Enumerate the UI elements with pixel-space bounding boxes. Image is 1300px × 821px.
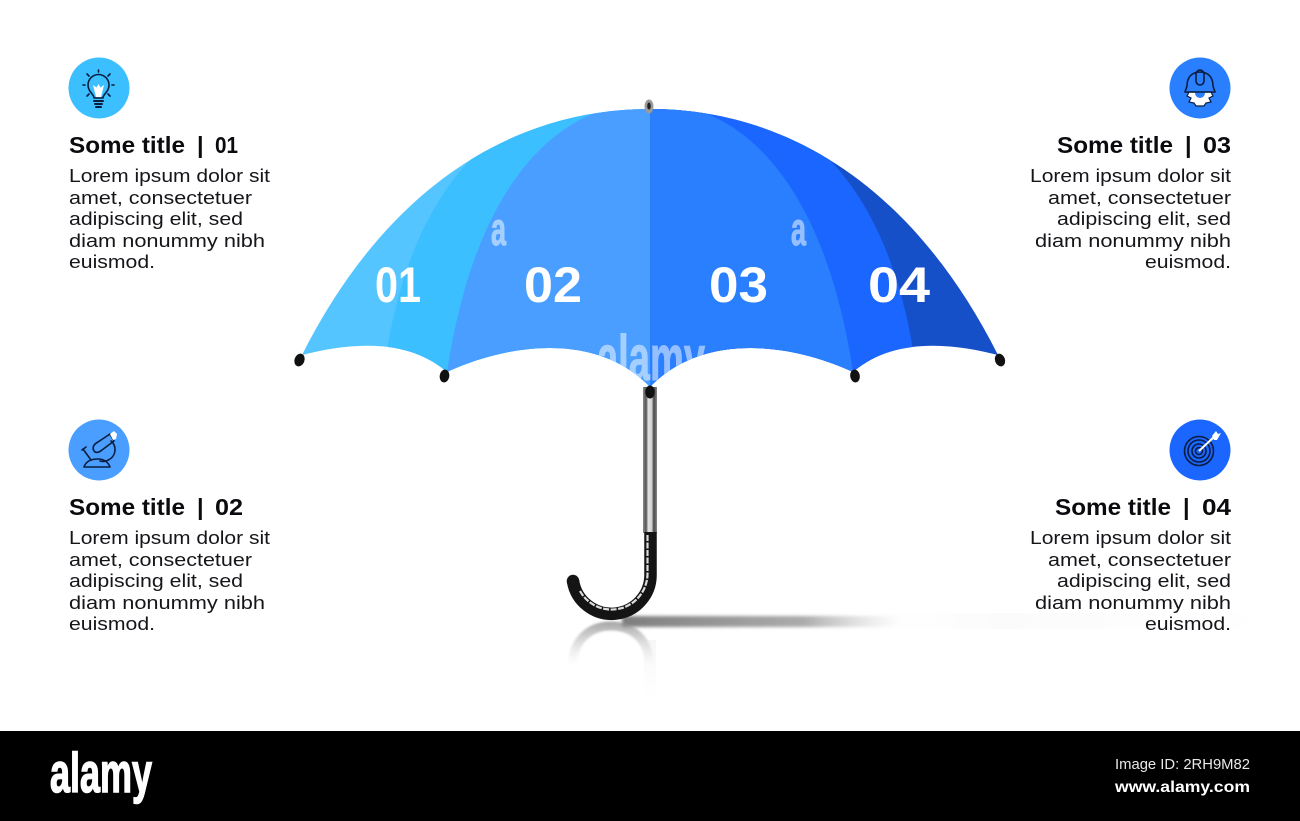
text 01: diam nonummy nibh xyxy=(69,230,265,251)
footer bar xyxy=(0,731,1300,821)
text 03: adipiscing elit, sed xyxy=(1057,208,1231,229)
panel 01 outer xyxy=(302,109,649,386)
text 01 xyxy=(69,165,270,272)
title 03: 03 xyxy=(1203,132,1231,158)
text 03: amet, consectetuer xyxy=(1048,187,1231,208)
number 04: 04 xyxy=(868,257,930,313)
text 02: euismod. xyxy=(69,613,155,634)
panel 03 xyxy=(650,100,853,400)
image id: Image ID: 2RH9M82 xyxy=(1115,757,1250,773)
title 02: Some title xyxy=(69,494,185,520)
canopy watermark: a xyxy=(491,203,506,255)
panel 04 outer xyxy=(651,109,998,386)
text 02: diam nonummy nibh xyxy=(69,592,265,613)
text 01: amet, consectetuer xyxy=(69,187,252,208)
title 03: Some title xyxy=(1057,132,1173,158)
text 01: adipiscing elit, sed xyxy=(69,208,243,229)
text 03: euismod. xyxy=(1145,251,1231,272)
text 02: adipiscing elit, sed xyxy=(69,570,243,591)
text 03: Lorem ipsum dolor sit xyxy=(1030,165,1231,186)
text 04: euismod. xyxy=(1145,613,1231,634)
block 03 xyxy=(1030,58,1231,272)
icon: target with dart xyxy=(1170,420,1230,480)
text 04: amet, consectetuer xyxy=(1048,549,1231,570)
title 04: | xyxy=(1183,494,1190,520)
block 04 xyxy=(1030,420,1231,634)
title 03: | xyxy=(1185,132,1192,158)
title 02: | xyxy=(197,494,204,520)
footer logo: alamy xyxy=(50,741,152,804)
canopy watermark: a xyxy=(791,203,806,255)
text 04: diam nonummy nibh xyxy=(1035,592,1231,613)
icon: light bulb xyxy=(68,58,130,118)
text 03 xyxy=(1030,165,1231,272)
cast shadow xyxy=(622,613,1280,629)
website: www.alamy.com xyxy=(1114,779,1250,796)
title 03 xyxy=(1057,132,1231,158)
title 01 xyxy=(69,132,238,158)
text 02 xyxy=(69,527,270,634)
title 01: 01 xyxy=(215,132,238,158)
icon: microscope xyxy=(68,420,130,480)
number 03: 03 xyxy=(709,257,768,313)
title 04: Some title xyxy=(1055,494,1171,520)
canopy watermark xyxy=(492,220,806,381)
canopy watermark: alamy xyxy=(597,322,705,394)
handle reflection xyxy=(573,626,656,704)
panel 04 inner xyxy=(650,100,913,400)
text 03: diam nonummy nibh xyxy=(1035,230,1231,251)
text 01: euismod. xyxy=(69,251,155,272)
text 04: Lorem ipsum dolor sit xyxy=(1030,527,1231,548)
block 02 xyxy=(68,420,270,634)
title 02 xyxy=(69,494,243,520)
title 04 xyxy=(1055,494,1231,520)
text 02: amet, consectetuer xyxy=(69,549,252,570)
icon: hard hat with gear xyxy=(1170,58,1230,118)
text 02: Lorem ipsum dolor sit xyxy=(69,527,270,548)
canopy top cap xyxy=(644,100,654,114)
umbrella illustration xyxy=(280,100,1280,704)
title 01: Some title xyxy=(69,132,185,158)
umbrella shaft xyxy=(643,387,657,533)
text 04: adipiscing elit, sed xyxy=(1057,570,1231,591)
text 04 xyxy=(1030,527,1231,634)
block 01 xyxy=(68,58,270,272)
canopy xyxy=(302,109,998,386)
number 02: 02 xyxy=(524,257,582,313)
title 02: 02 xyxy=(215,494,243,520)
title 01: | xyxy=(197,132,204,158)
text 01: Lorem ipsum dolor sit xyxy=(69,165,270,186)
canopy rib tips xyxy=(293,352,1007,398)
umbrella hook handle xyxy=(567,532,651,614)
number 01: 01 xyxy=(375,257,421,313)
panel 02 xyxy=(447,100,650,400)
panel 01 inner xyxy=(387,100,650,400)
title 04: 04 xyxy=(1202,494,1231,520)
